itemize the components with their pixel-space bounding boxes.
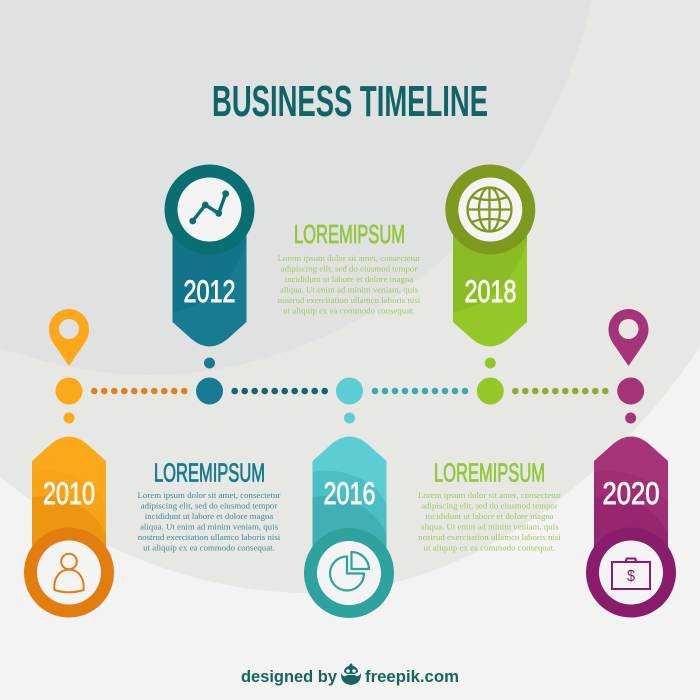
small dot 2012 [204,358,215,368]
small dot 2018 [485,358,496,368]
paragraph: aliqua. Ut enim ad minim veniam, quis [420,522,559,532]
pin 2010 [49,309,89,366]
heading: LOREMIPSUM [434,460,545,488]
icon: briefcase: $ [627,567,636,585]
medallion 2018 [445,164,535,254]
text block: bottom left [138,460,281,552]
paragraph: adipiscing elit, sed do eiusmod tempor [421,500,558,510]
banner 2010 [32,436,106,547]
paragraph: aliqua. Ut enim ad minim veniam, quis [280,284,419,294]
node 2018 [477,378,504,404]
year 2020: 2020 [602,475,660,511]
paragraph: ut aliquip ex ea commodo consequat. [283,306,415,316]
medallion 2012 [164,164,254,254]
node 2010 [56,378,82,404]
paragraph: nostrud exercitation ullamco laboris nisi [138,532,281,542]
year 2016: 2016 [324,475,376,511]
node 2016 [336,378,363,404]
footer credit: freepik.com [365,667,459,686]
text block: bottom right [418,460,561,552]
paragraph: nostrud exercitation ullamco laboris nisi [278,295,421,305]
banner 2012 [172,235,246,346]
text block: top center [278,221,421,316]
heading: LOREMIPSUM [294,221,405,249]
milestone 2020 [586,309,676,618]
paragraph: incididunt ut labore et dolore magna [145,511,273,521]
small dot 2016 [344,412,355,424]
small dot 2010 [64,412,74,424]
year 2018: 2018 [464,273,516,309]
milestone 2010 [24,309,114,618]
title: BUSINESS TIMELINE [212,78,488,126]
paragraph: Lorem ipsum dolor sit amet, consectetur [278,253,421,263]
icon: globe [468,188,512,232]
paragraph: incididunt ut labore et dolore magna [425,511,554,521]
paragraph: adipiscing elit, sed do eiusmod tempor [141,500,277,510]
icon: person [54,554,84,592]
paragraph: Lorem ipsum dolor sit amet, consectetur [138,490,281,500]
icon: freepik logo [341,664,361,685]
banner 2016 [312,436,386,548]
paragraph: adipiscing elit, sed do eiusmod tempor [281,264,417,274]
paragraph: Lorem ipsum dolor sit amet, consectetur [418,490,561,500]
year 2010: 2010 [43,475,95,511]
small dot 2020 [625,412,636,424]
paragraph: incididunt ut labore et dolore magna [285,274,413,284]
milestone 2018 [445,164,535,404]
medallion 2016 [304,528,394,618]
paragraph: aliqua. Ut enim ad minim veniam, quis [140,522,279,532]
banner 2018 [453,234,527,346]
node 2020 [617,378,644,404]
pin 2020 [608,309,648,366]
medallion 2020 [586,528,676,618]
node 2012 [196,378,223,404]
footer credit [241,664,459,686]
medallion 2010 [24,528,114,618]
paragraph: ut aliquip ex ea commodo consequat. [424,542,555,552]
icon: line chart [189,190,229,224]
banner 2020 [594,436,668,547]
milestone 2012 [164,164,254,404]
paragraph: nostrud exercitation ullamco laboris nisi [418,532,561,542]
heading: LOREMIPSUM [154,460,265,488]
icon: pie chart [330,552,369,590]
year 2012: 2012 [184,273,236,309]
milestone 2016 [304,378,394,618]
footer credit: designed by [241,667,338,686]
timeline connector dots [91,388,609,394]
paragraph: ut aliquip ex ea commodo consequat. [143,542,275,552]
